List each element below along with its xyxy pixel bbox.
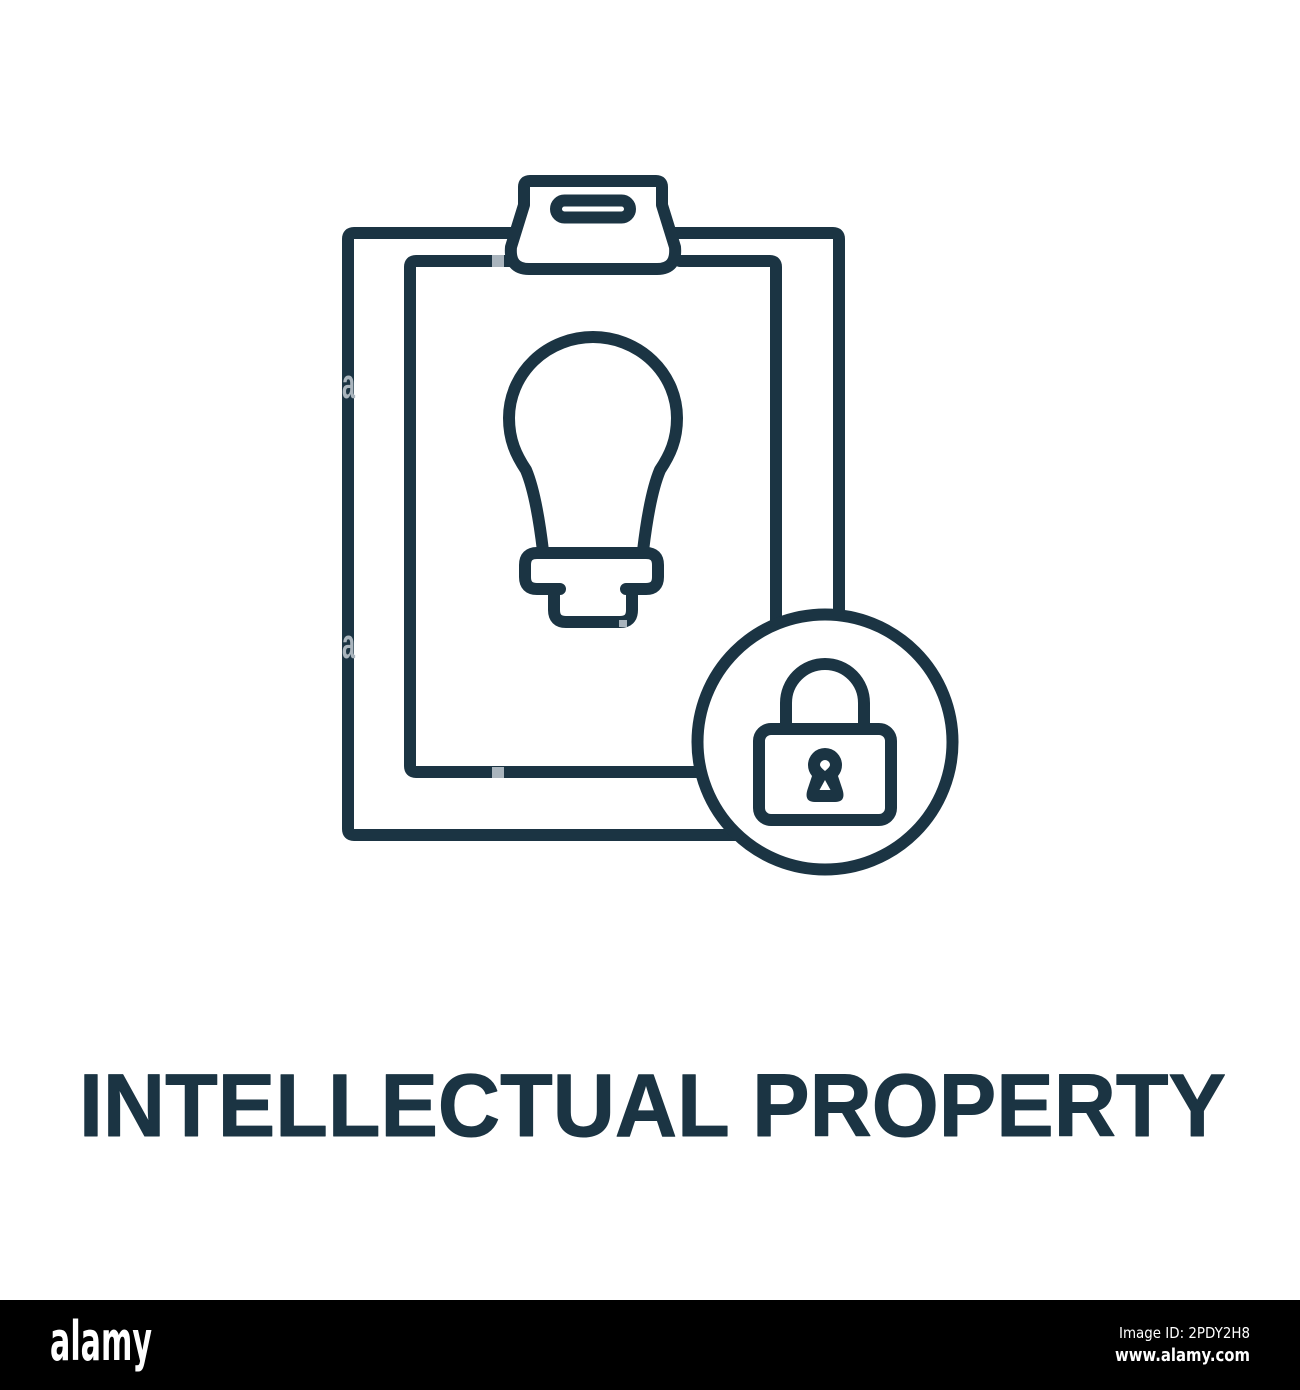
bulb screw base [554,589,632,622]
clipboard inner sheet [410,261,776,772]
title: INTELLECTUAL PROPERTY [79,1055,1226,1155]
clip slot [556,200,630,218]
padlock body [759,729,891,820]
bulb collar [525,553,658,589]
keyhole openings [820,760,830,790]
clipboard outer board [348,233,839,835]
website: www.alamy.com [1115,1345,1250,1366]
watermark fragments: a [342,620,355,667]
padlock shackle [786,664,864,729]
watermark fragments: a [342,360,355,407]
clipboard clip [511,181,675,269]
footer bar [0,1300,1300,1390]
icon: intellectual property clipboard [348,181,952,870]
footer logo: alamy [50,1310,152,1373]
image id: Image ID: 2PDY2H8 [1119,1324,1250,1342]
padlock keyhole [807,748,843,802]
keyhole silhouette [807,748,843,802]
watermark fragments [342,255,627,778]
bulb glass [509,337,677,551]
badge circle [698,614,952,870]
icon: lock badge [698,614,952,870]
icon: light bulb [509,337,677,622]
